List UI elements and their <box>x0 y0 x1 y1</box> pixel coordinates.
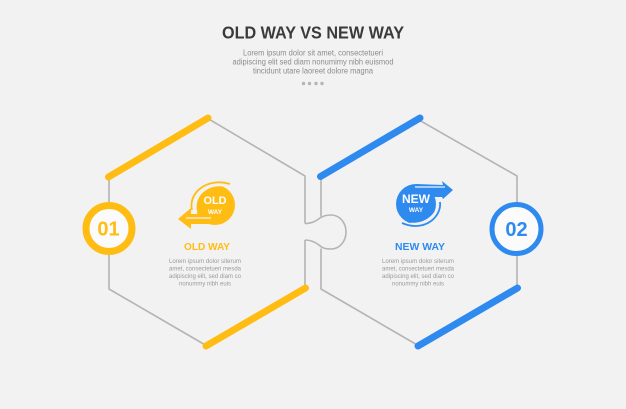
intro text: Lorem ipsum dolor sit amet, consectetueri <box>243 48 383 58</box>
icon: old way arrow: WAY <box>208 209 223 216</box>
label: old way: OLD WAY <box>184 242 230 253</box>
hexagon outline: new way <box>321 120 517 346</box>
body text: old way: Lorem ipsum dolor siterum <box>169 258 241 265</box>
icon: new way arrow: NEW <box>402 192 431 206</box>
body text: old way <box>169 258 241 288</box>
intro text: tincidunt utare laoreet dolore magna <box>253 66 374 76</box>
body text: new way: Lorem ipsum dolor siterum <box>382 258 454 265</box>
number badge 01: 01 <box>97 218 120 240</box>
icon: old way arrow <box>178 182 235 229</box>
body text: old way: nonummy nibh euis <box>179 280 231 288</box>
icon: old way arrow: OLD <box>204 195 227 207</box>
number badge 02 <box>492 204 541 254</box>
puzzle joint knob <box>305 215 346 249</box>
body text: new way: adipiscing elit, sed diam co <box>382 273 454 280</box>
intro text <box>232 48 394 76</box>
icon: new way arrow: WAY <box>409 207 424 214</box>
body text: new way: nonummy nibh euis <box>392 280 444 288</box>
yellow accent bars <box>108 118 306 346</box>
label: new way: NEW WAY <box>395 242 445 253</box>
number badge 02: 02 <box>505 219 528 241</box>
title: OLD WAY VS NEW WAY <box>222 22 404 42</box>
body text: old way: amet, consectetueri mesda <box>169 266 241 272</box>
number badge 01 <box>86 206 132 252</box>
blue accent bars <box>320 118 518 346</box>
body text: new way <box>382 258 454 288</box>
body text: old way: adipiscing elit, sed diam co <box>169 273 241 280</box>
icon: new way arrow <box>396 181 453 226</box>
body text: new way: amet, consectetueri mesda <box>382 266 454 272</box>
pagination dots <box>302 82 324 85</box>
intro text: adipiscing elit sed diam nonumimy nibh euismod <box>232 58 394 66</box>
hexagon outline: old way <box>109 118 305 346</box>
